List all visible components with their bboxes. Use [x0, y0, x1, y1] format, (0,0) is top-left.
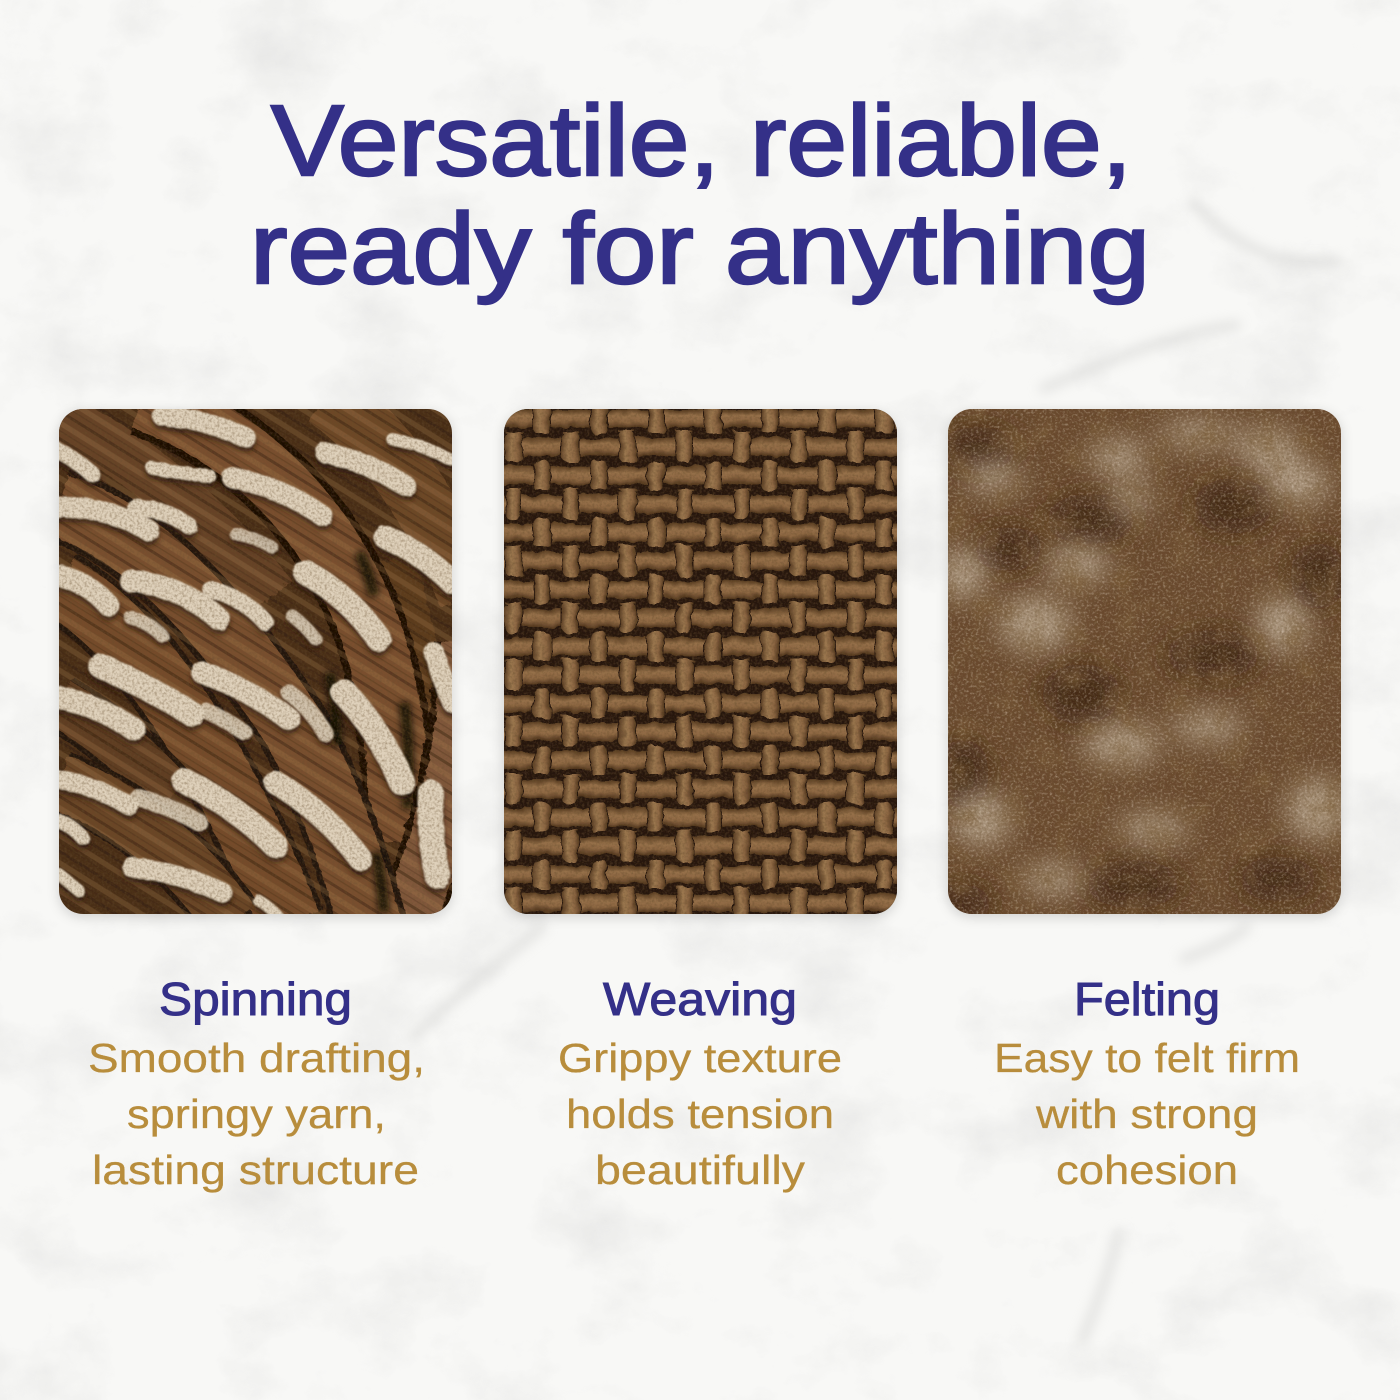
caption: felting: with strong — [1035, 1091, 1258, 1137]
title: ready for anything — [250, 193, 1150, 305]
caption: weaving: Grippy texture — [558, 1035, 842, 1081]
caption: felting: cohesion — [1056, 1147, 1238, 1193]
caption: felting — [994, 973, 1300, 1193]
caption: weaving — [558, 973, 842, 1193]
caption: spinning — [88, 973, 425, 1193]
caption: spinning: lasting structure — [92, 1147, 419, 1193]
caption: felting: Felting — [1074, 973, 1220, 1025]
caption: felting: Easy to felt firm — [994, 1035, 1300, 1081]
caption: spinning: springy yarn, — [127, 1091, 386, 1137]
caption: weaving: beautifully — [595, 1147, 806, 1193]
title: Versatile, reliable, — [271, 85, 1132, 197]
caption: spinning: Spinning — [159, 973, 352, 1025]
caption: spinning: Smooth drafting, — [88, 1035, 425, 1081]
title — [250, 85, 1150, 305]
panel: spinning yarn photo — [56, 396, 469, 922]
caption: weaving: Weaving — [603, 973, 797, 1025]
panel: felting wool photo — [923, 409, 1348, 924]
panel: weaving cloth photo — [494, 399, 907, 924]
caption: weaving: holds tension — [566, 1091, 834, 1137]
